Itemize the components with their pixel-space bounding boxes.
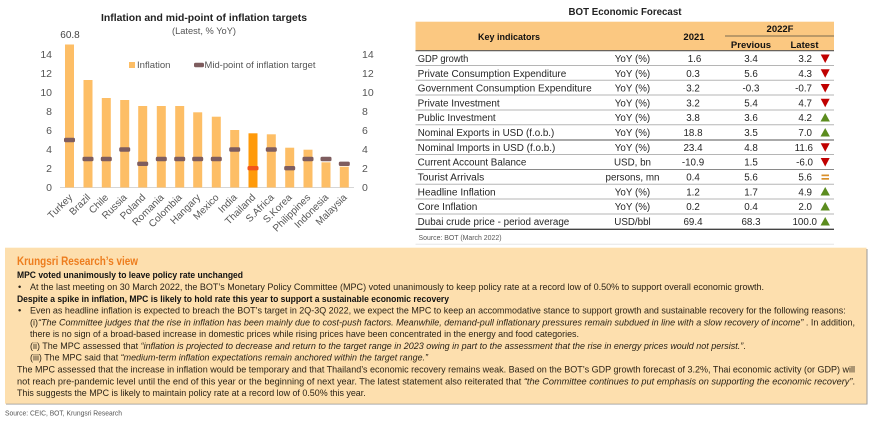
right axis: 14 xyxy=(362,49,374,61)
row: Private Investment: 3.2 xyxy=(686,98,700,110)
row: Current Account Balance: USD, bn xyxy=(614,158,651,169)
row: Headline Inflation: 1.2 xyxy=(686,187,700,198)
row: Current Account Balance: Current Account Balance xyxy=(418,158,527,169)
row: Public Investment: 4.2 xyxy=(798,113,812,124)
row: Tourist Arrivals: 0.4 xyxy=(686,172,700,184)
row: Government Consumption Expenditure: -0.3 xyxy=(743,84,760,95)
row: GDP growth xyxy=(418,54,830,65)
row: Government Consumption Expenditure: -0.7 xyxy=(795,84,812,95)
country labels: India xyxy=(217,192,240,215)
row: Headline Inflation xyxy=(418,187,830,198)
source note: Source: CEIC, BOT, Krungsri Research xyxy=(5,408,122,418)
chart legend xyxy=(129,60,316,71)
row: Nominal Imports: 23.4 xyxy=(683,143,703,154)
right axis: 8 xyxy=(362,106,368,118)
left axis: 4 xyxy=(46,144,52,156)
left axis: 8 xyxy=(46,106,52,118)
row: Dubai crude price: 100.0 xyxy=(792,217,818,228)
row: GDP growth: YoY (%) xyxy=(615,54,650,65)
row: Core Inflation: 2.0 xyxy=(798,202,813,213)
row: Government Consumption Expenditure: 3.2 xyxy=(686,84,700,95)
row: Dubai crude price: 68.3 xyxy=(741,217,761,228)
left axis: 0 xyxy=(46,182,52,194)
table header: Key indicators xyxy=(478,32,540,43)
row: Nominal Exports xyxy=(418,128,830,139)
country labels: Malaysia xyxy=(314,192,350,228)
chart legend: Mid-point of inflation target xyxy=(204,60,316,71)
bullet: reasons xyxy=(18,304,855,363)
country labels: Thailand xyxy=(223,192,258,227)
row: Core Inflation: 0.2 xyxy=(686,202,700,213)
chart subtitle: (Latest, % YoY) xyxy=(172,26,236,37)
row: Nominal Exports: YoY (%) xyxy=(615,128,650,139)
country labels: Russia xyxy=(100,192,130,222)
row: Government Consumption Expenditure: Government Consumption Expenditure xyxy=(418,84,592,95)
country labels: S.Africa xyxy=(244,192,277,225)
conclusion paragraph: The MPC assessed that the increase in inflation would be temporary and that Thailand’s economic recovery remains weak. Based on the BOT’s GDP growth forecast of 3.2%, Thai economic activity (or GDP) will xyxy=(17,364,855,374)
row: Dubai crude price: Dubai crude price - period average xyxy=(418,217,570,228)
table source note: Source: BOT (March 2022) xyxy=(418,233,502,242)
conclusion paragraph: This suggests the MPC is likely to maintain policy rate at a record low of 0.50% this year. xyxy=(17,387,366,398)
row: Private Consumption Expenditure: YoY (%) xyxy=(615,69,650,80)
row: Headline Inflation: Headline Inflation xyxy=(418,187,496,198)
left axis: 6 xyxy=(46,125,52,137)
panel: inflation chart xyxy=(40,12,374,234)
row: Dubai crude price xyxy=(418,217,830,228)
row: Tourist Arrivals: persons, mn xyxy=(606,172,660,184)
row: Current Account Balance: -10.9 xyxy=(682,158,704,169)
right axis xyxy=(362,49,374,194)
country labels: Turkey xyxy=(46,192,75,221)
row: Nominal Exports: Nominal Exports in USD (f.o.b.) xyxy=(418,128,554,139)
left axis: 10 xyxy=(40,87,52,99)
row: Tourist Arrivals: Tourist Arrivals xyxy=(418,172,484,184)
bullet: reasons: (i)“The Committee judges that the rise in inflation has been mainly due to cost-push factors. Meanwhile, demand-pull inflationary pressures remain subdued in line with a slow recovery of income” . In addition, xyxy=(30,316,855,328)
row: Dubai crude price: 69.4 xyxy=(683,217,703,228)
conclusion paragraph xyxy=(17,364,855,398)
panel: Krungsri Research's view xyxy=(5,248,868,404)
right axis: 2 xyxy=(362,163,368,175)
bullet: reasons: • xyxy=(18,304,21,316)
row: Private Investment: 5.4 xyxy=(744,98,758,110)
row: Tourist Arrivals: 5.6 xyxy=(744,172,758,184)
row: Core Inflation: 0.4 xyxy=(744,202,758,213)
panel heading: Krungsri Research’s view xyxy=(17,256,138,268)
country labels: S.Korea xyxy=(261,192,295,226)
left axis xyxy=(40,49,52,194)
country labels: Poland xyxy=(118,192,148,222)
right axis: 12 xyxy=(362,68,374,80)
row: Nominal Imports: Nominal Imports in USD (f.o.b.) xyxy=(418,143,555,154)
country labels: Hangary xyxy=(169,192,203,227)
panel fill xyxy=(5,248,866,404)
panel background xyxy=(6,249,868,404)
row: Core Inflation xyxy=(418,202,830,213)
row: Nominal Exports: 3.5 xyxy=(744,128,758,139)
subheading: policy rate: MPC voted unanimously to leave policy rate unchanged xyxy=(17,269,243,280)
row: Private Investment: 4.7 xyxy=(798,98,812,110)
table header: Previous xyxy=(731,40,771,51)
country labels: Brazil xyxy=(68,192,93,218)
row: Private Consumption Expenditure: 0.3 xyxy=(686,69,700,80)
right axis: 4 xyxy=(362,144,368,156)
row: Tourist Arrivals: 5.6 xyxy=(798,172,813,184)
row: Nominal Imports: 11.6 xyxy=(795,143,814,154)
row: Dubai crude price: USD/bbl xyxy=(614,217,651,228)
table header: Latest xyxy=(791,40,819,51)
bullet: reasons: Even as headline inflation is expected to breach the BOT’s target in 2Q-3Q 2022, we expect the MPC to keep an accommodative stance to support growth and sustainable recovery for the following reasons: xyxy=(30,304,846,316)
right axis: 6 xyxy=(362,125,368,137)
row: Nominal Exports: 18.8 xyxy=(683,128,703,139)
country labels: Chile xyxy=(87,192,111,216)
country labels: Mexico xyxy=(191,192,222,223)
row: GDP growth: 3.4 xyxy=(744,54,758,65)
country labels: Indonesia xyxy=(293,192,331,231)
right axis: 0 xyxy=(362,182,368,194)
row: Headline Inflation: 1.7 xyxy=(744,187,758,198)
chart legend: Inflation xyxy=(137,60,170,71)
row: Private Consumption Expenditure: Private Consumption Expenditure xyxy=(418,69,567,80)
Turkey off-scale value: 60.8 xyxy=(60,30,80,41)
bullet: reasons: (iii) The MPC said that “medium-term inflation expectations remain anchored within the target range.” xyxy=(30,352,429,363)
row: GDP growth: 3.2 xyxy=(798,54,812,65)
right axis: 10 xyxy=(362,87,374,99)
row: Headline Inflation: YoY (%) xyxy=(615,187,650,198)
row: Core Inflation: YoY (%) xyxy=(615,202,650,213)
inflation bars xyxy=(65,44,349,188)
row: Nominal Exports: 7.0 xyxy=(798,128,813,139)
row: Private Investment: Private Investment xyxy=(418,98,500,110)
row: Tourist Arrivals xyxy=(418,172,829,184)
row: Public Investment: 3.6 xyxy=(744,113,758,124)
bullet: last meeting: At the last meeting on 30 March 2022, the BOT’s Monetary Policy Committee (MPC) voted unanimously to keep policy rate at a record low of 0.50% to support overall economic growth. xyxy=(30,281,764,292)
row: Nominal Imports xyxy=(418,143,830,154)
table header: 2021 xyxy=(683,32,705,43)
country labels: Colombia xyxy=(147,192,185,230)
row: Nominal Imports: 4.8 xyxy=(744,143,758,154)
country labels: Philippines xyxy=(271,192,313,234)
row: Core Inflation: Core Inflation xyxy=(418,202,477,213)
row: Private Consumption Expenditure: 4.3 xyxy=(798,69,813,80)
subheading: inflation spike: Despite a spike in inflation, MPC is likely to hold rate this year to support a sustainable economic recovery xyxy=(17,293,450,304)
row: Government Consumption Expenditure xyxy=(418,84,830,95)
row: Current Account Balance xyxy=(418,158,830,169)
row: Government Consumption Expenditure: YoY (%) xyxy=(615,84,650,95)
row: Private Consumption Expenditure xyxy=(418,69,830,80)
row: Headline Inflation: 4.9 xyxy=(798,187,812,198)
country labels xyxy=(46,192,350,234)
row: Private Investment xyxy=(418,98,830,110)
row: Private Investment: YoY (%) xyxy=(615,98,650,110)
row: Public Investment: Public Investment xyxy=(418,113,496,124)
inflation target markers xyxy=(64,138,350,170)
row: Public Investment: 3.8 xyxy=(686,113,700,124)
row: Current Account Balance: 1.5 xyxy=(744,158,758,169)
country labels: Romania xyxy=(131,192,167,228)
table title: BOT Economic Forecast xyxy=(568,7,682,18)
left axis: 2 xyxy=(46,163,52,175)
chart title: Inflation and mid-point of inflation targets xyxy=(101,12,307,24)
bullet: last meeting: • xyxy=(18,281,21,292)
left axis: 12 xyxy=(40,68,52,80)
row: Public Investment: YoY (%) xyxy=(615,113,650,124)
row: Public Investment xyxy=(418,113,830,124)
row separators xyxy=(416,51,834,244)
left axis: 14 xyxy=(40,49,52,61)
table header: 2022F xyxy=(767,24,794,35)
conclusion paragraph: not reach pre-pandemic level until the end of this year or the beginning of next year. The latest statement also reiterated that “the Committee continues to put emphasis on supporting the economic recovery”. xyxy=(17,376,855,386)
table header xyxy=(416,22,834,51)
row: GDP growth: GDP growth xyxy=(418,54,468,65)
row: Nominal Imports: YoY (%) xyxy=(615,143,650,154)
bullet: reasons: there is no sign of a broad-based increase in domestic prices while rising prices have been concentrated in the energy and food categories. xyxy=(30,328,579,339)
row: GDP growth: 1.6 xyxy=(688,54,702,65)
bullet: reasons: (ii) The MPC assessed that “inflation is projected to decrease and return to the target range in 2023 owing in part to the assessment that the rise in energy prices would not persist.”. xyxy=(30,340,746,351)
row: Current Account Balance: -6.0 xyxy=(796,158,814,169)
row: Private Consumption Expenditure: 5.6 xyxy=(744,69,758,80)
panel: BOT economic forecast table xyxy=(416,7,834,244)
